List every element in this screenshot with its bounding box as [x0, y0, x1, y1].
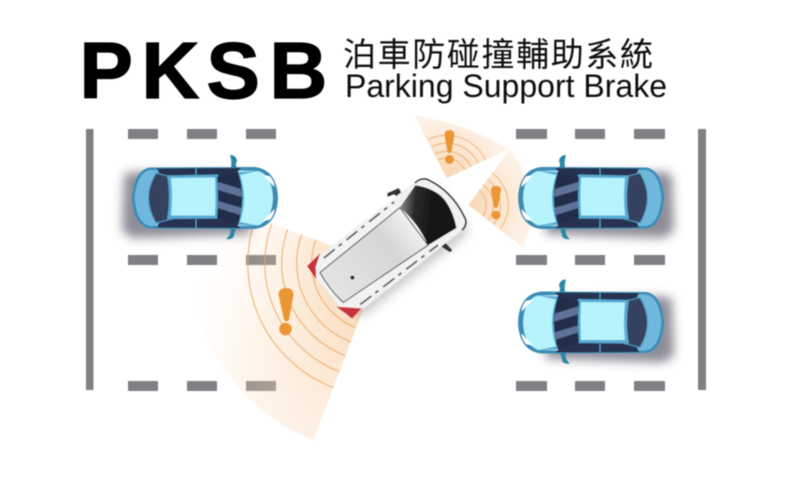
heading: Chinese system name: 泊車防碰撞輔助系統	[343, 36, 653, 73]
car: parked blue top right	[518, 155, 674, 239]
parking lot markings	[86, 129, 706, 391]
rear sensor wave zone	[214, 222, 364, 440]
infographic: parking support brake diagram	[83, 37, 707, 440]
front left sensor wave zone	[414, 115, 508, 178]
icon: front right warning exclamation	[491, 186, 501, 220]
heading: PKSB: PKSB	[80, 26, 327, 115]
icon: rear warning exclamation	[278, 288, 294, 335]
front right sensor wave zone	[468, 149, 531, 248]
car: parked blue bottom right	[518, 280, 674, 364]
icon: front left warning exclamation	[444, 130, 454, 164]
car: parked blue left	[122, 155, 278, 239]
heading: English system name: Parking Support Brake	[345, 68, 667, 104]
car: white reversing car	[301, 164, 478, 328]
title	[80, 26, 667, 115]
